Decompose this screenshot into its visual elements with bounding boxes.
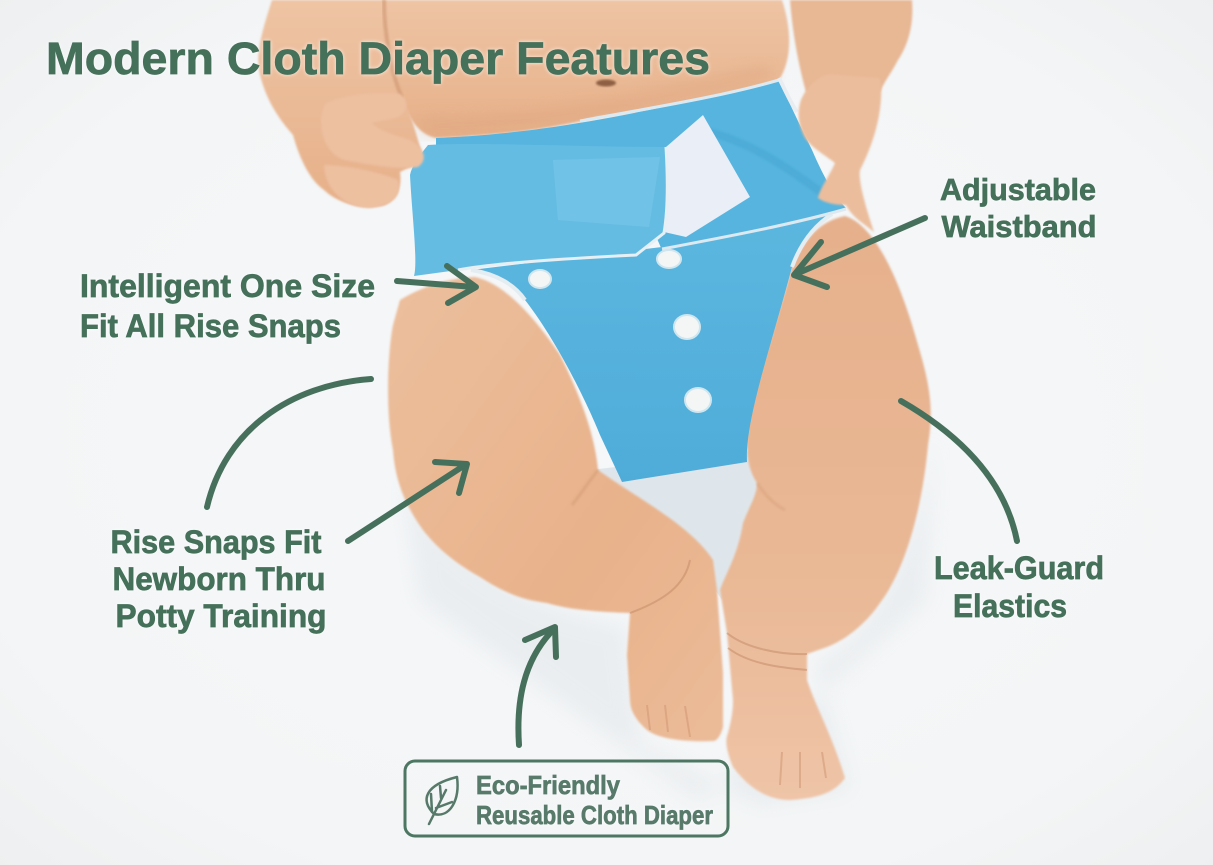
arm crease [384, 0, 402, 98]
gap shadow between legs [590, 450, 762, 600]
label: rise snaps [110, 524, 326, 634]
right leg [720, 216, 931, 800]
label: leak-guard: Leak-Guard [934, 550, 1104, 586]
arrow: intelligent snaps [397, 266, 476, 303]
toes [647, 705, 826, 788]
label: intelligent snaps: Intelligent One Size [80, 268, 375, 304]
tab outline [458, 147, 667, 270]
back waistband [436, 80, 846, 250]
diaper body [471, 214, 832, 482]
label: rise snaps: Potty Training [116, 598, 326, 634]
callout: eco friendly: Reusable Cloth Diaper [476, 800, 713, 830]
right arm [790, 0, 912, 92]
left hand [321, 93, 424, 208]
left leg [388, 277, 723, 741]
label: leak-guard: Elastics [953, 588, 1067, 624]
label: adjustable waistband: Adjustable [940, 172, 1096, 207]
callout: eco friendly: Eco-Friendly [476, 770, 620, 800]
knee crease [572, 470, 598, 505]
baby illustration [258, 0, 935, 805]
waist tab [410, 144, 667, 276]
icon: leaf [427, 777, 458, 824]
ankle creases [630, 560, 807, 670]
curve connector: left [207, 379, 371, 507]
label: intelligent snaps [80, 268, 375, 344]
navel [596, 80, 616, 86]
right hand [799, 74, 881, 232]
label: leak-guard [934, 550, 1104, 624]
curve connector: right [901, 401, 1017, 541]
tab panel [553, 157, 660, 227]
label: adjustable waistband [940, 172, 1096, 244]
waistband fold [700, 130, 825, 195]
snaps [529, 250, 711, 412]
arrow: rise snaps [348, 462, 467, 541]
title: Modern Cloth Diaper Features [46, 33, 710, 84]
callout: eco friendly [405, 761, 728, 836]
velcro patch [664, 115, 750, 237]
body shadow [400, 420, 935, 805]
label: rise snaps: Rise Snaps Fit [110, 524, 322, 560]
arrow: eco friendly [518, 627, 556, 745]
label: intelligent snaps: Fit All Rise Snaps [80, 308, 341, 344]
elastic edges [471, 214, 832, 300]
torso [382, 0, 789, 138]
left arm [258, 0, 424, 207]
arrow: adjustable waistband [794, 218, 925, 287]
belly shading [420, 72, 770, 125]
label: adjustable waistband: Waistband [942, 209, 1096, 244]
waistband edges [580, 80, 846, 249]
label: rise snaps: Newborn Thru [112, 561, 326, 597]
